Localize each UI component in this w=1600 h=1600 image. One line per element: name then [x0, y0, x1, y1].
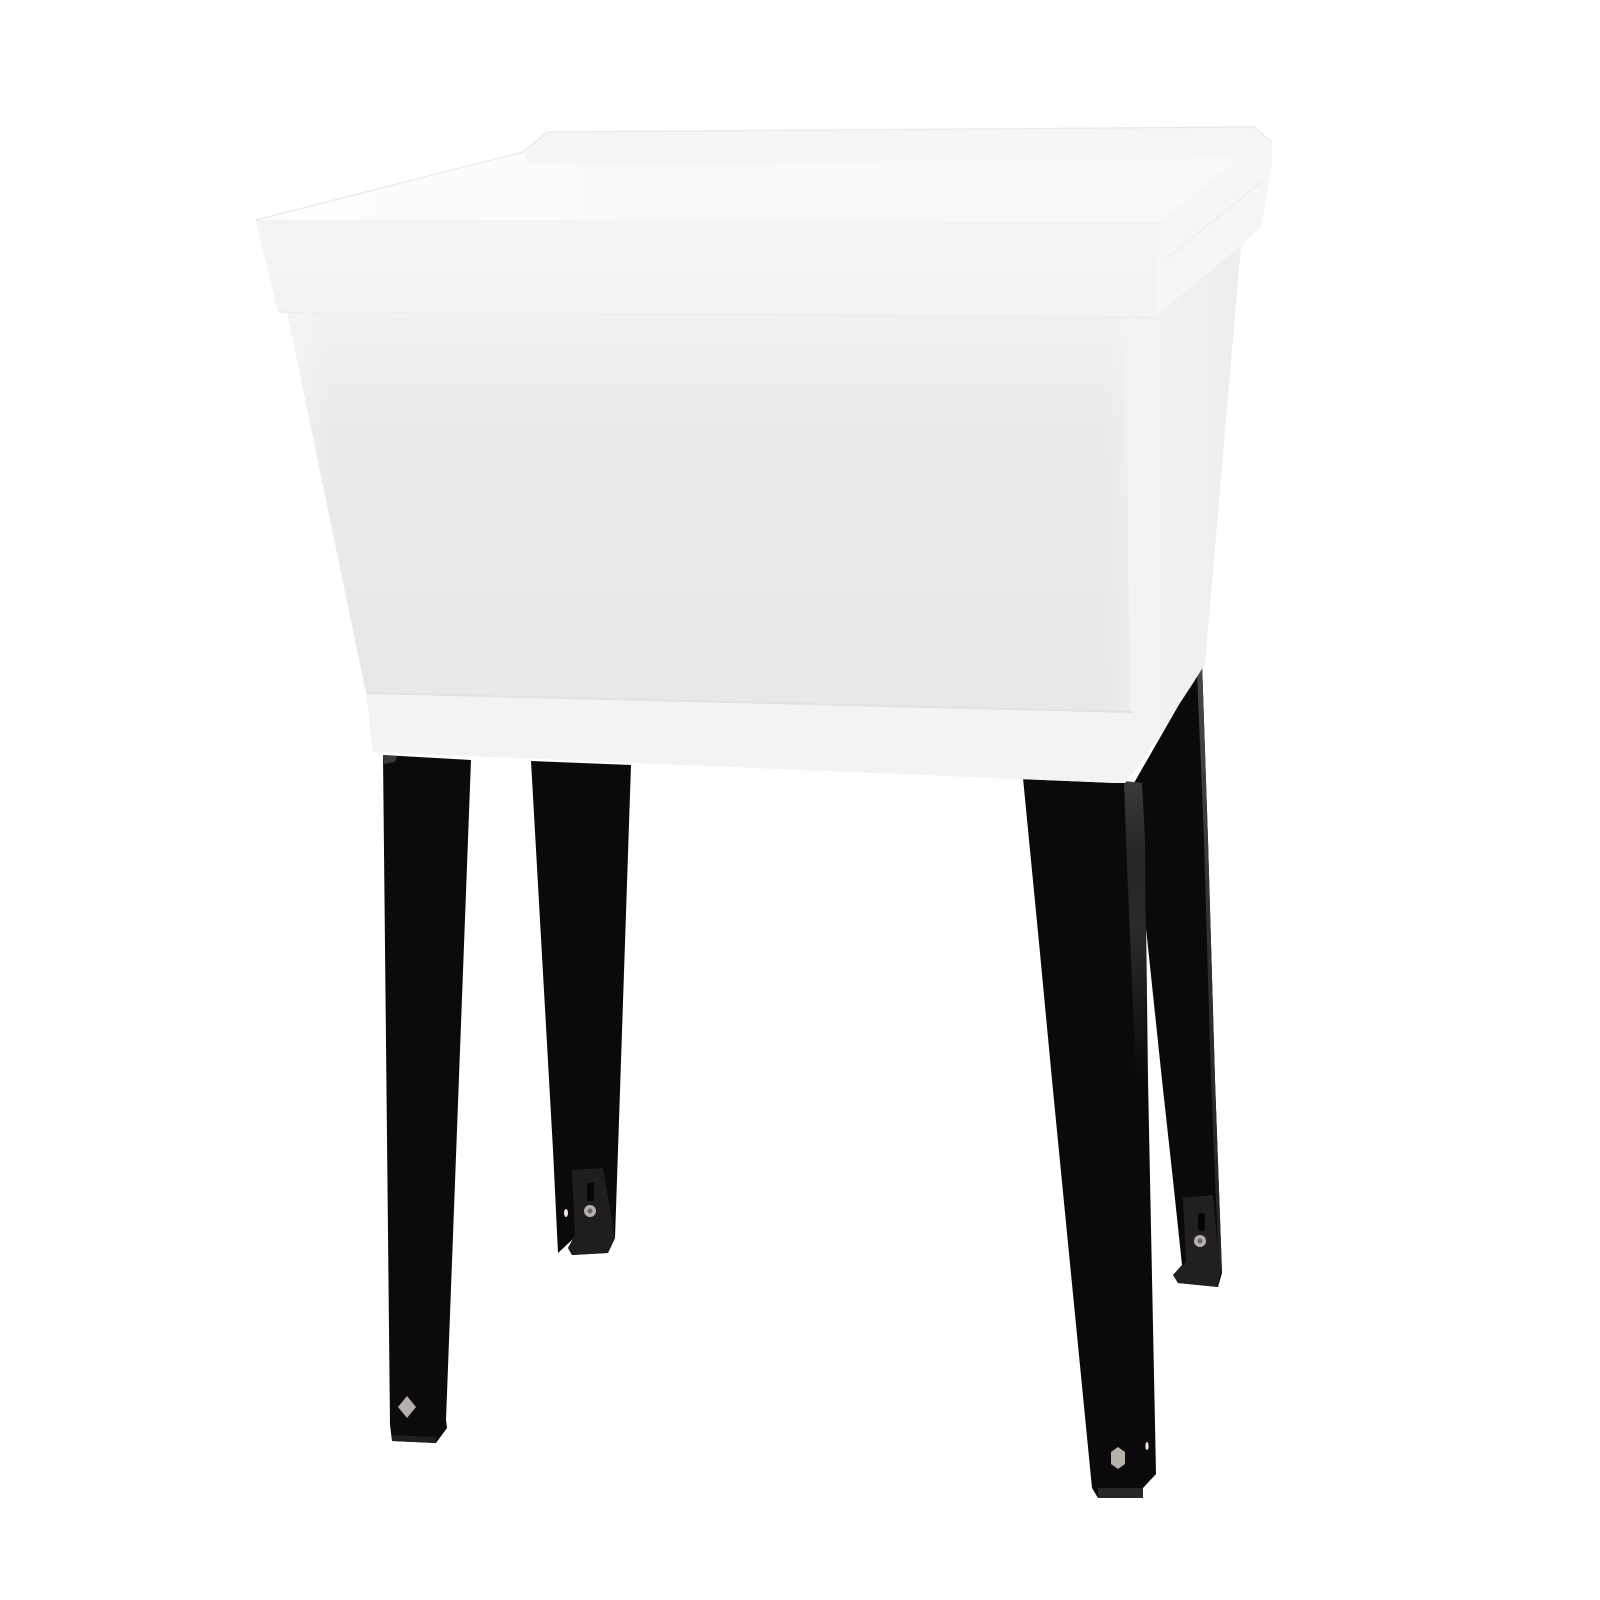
back right adjuster plate: [1173, 1195, 1220, 1287]
front right leg: [1023, 778, 1156, 1498]
back deck: [523, 127, 1272, 165]
front wall: [287, 312, 1130, 714]
basin interior: [256, 127, 1272, 222]
right side wall: [1125, 244, 1241, 783]
front right leg bolt: [1111, 1447, 1125, 1469]
back right leg: [1130, 662, 1222, 1287]
front left leg: [383, 755, 471, 1443]
front rim: [256, 222, 1160, 316]
right rim: [1153, 142, 1272, 318]
front left leg bolt: [398, 1396, 416, 1418]
back left adjuster plate: [564, 1168, 615, 1255]
sink basin: [256, 127, 1272, 783]
back left leg: [531, 761, 631, 1255]
basin silhouette: [256, 127, 1272, 783]
bottom band: [366, 693, 1133, 783]
